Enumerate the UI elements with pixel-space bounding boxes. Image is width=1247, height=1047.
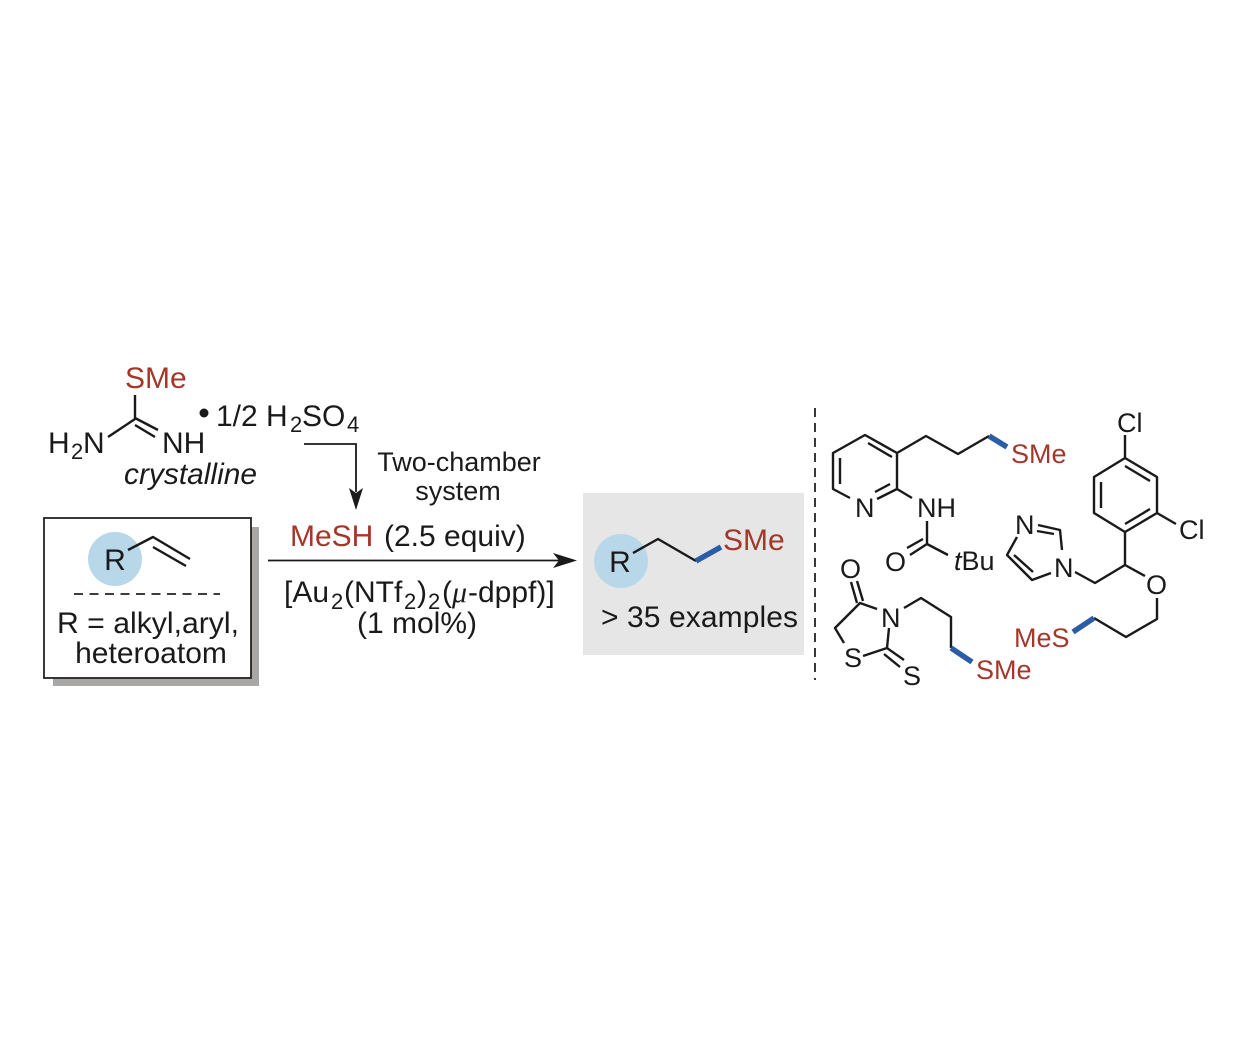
reagent: S-methylisothiourea hemisulfate: crystalline — [124, 458, 257, 491]
catalyst text: ) — [417, 576, 427, 609]
example: imidazole product: O — [1146, 570, 1167, 600]
catalyst text: 2 — [331, 589, 343, 614]
label: two-chamber system: system — [415, 476, 501, 506]
panel: alkene substrate: R = alkyl,aryl, — [57, 607, 239, 640]
example: pyridine product: SMe — [1011, 439, 1067, 469]
panel: alkene substrate: R — [104, 544, 126, 577]
reagent: S-methylisothiourea hemisulfate: 1/2 H — [216, 400, 288, 433]
reagent: S-methylisothiourea hemisulfate — [48, 362, 359, 491]
example: rhodanine product: SMe — [976, 655, 1032, 685]
example: rhodanine product: S — [903, 661, 921, 691]
example: imidazole product: N — [1015, 510, 1034, 540]
label: two-chamber system: Two-chamber — [377, 447, 541, 477]
panel: product: R — [609, 546, 631, 579]
reagent: S-methylisothiourea hemisulfate: 4 — [347, 412, 359, 437]
example: pyridine product — [833, 435, 1067, 577]
reagent text: MeSH: (2.5 equiv) — [384, 520, 526, 553]
icon: R group circle — [88, 532, 142, 586]
example: rhodanine product: N — [881, 603, 900, 633]
reagent: S-methylisothiourea hemisulfate: SMe — [125, 362, 187, 395]
catalyst text: 2 — [428, 589, 440, 614]
panel: alkene substrate — [44, 518, 259, 686]
panel: product — [583, 493, 804, 655]
example: pyridine product: O — [885, 547, 906, 577]
example: rhodanine product — [835, 554, 1032, 691]
panel: product: > 35 examples — [601, 601, 798, 634]
catalyst text: (NTf — [344, 576, 403, 609]
reagent text: MeSH: MeSH — [290, 520, 373, 553]
panel: alkene substrate: heteroatom — [75, 637, 227, 670]
example: pyridine product: NH — [917, 493, 956, 523]
catalyst text — [284, 576, 555, 640]
example: pyridine product: tBu — [954, 546, 995, 576]
reagent: S-methylisothiourea hemisulfate: N — [83, 427, 105, 460]
reagent: S-methylisothiourea hemisulfate: H — [48, 427, 70, 460]
arrow: two-chamber release — [304, 444, 363, 510]
example: pyridine product: N — [855, 493, 874, 523]
reaction arrow — [268, 553, 577, 568]
panel: product: SMe — [723, 524, 785, 557]
icon: R group circle — [594, 534, 648, 588]
example: imidazole product: Cl — [1179, 515, 1204, 545]
reagent: S-methylisothiourea hemisulfate: SO — [302, 400, 345, 433]
divider — [814, 408, 816, 680]
example: imidazole product: N — [1054, 553, 1074, 583]
catalyst text: 2 — [404, 589, 416, 614]
catalyst text: -dppf)] — [468, 576, 555, 609]
example: imidazole product: MeS — [1014, 623, 1070, 653]
reagent: S-methylisothiourea hemisulfate: 2 — [290, 412, 302, 437]
catalyst text: μ — [451, 576, 467, 609]
example: imidazole product — [1007, 408, 1204, 653]
catalyst text: ( — [442, 576, 452, 609]
reagent: S-methylisothiourea hemisulfate: NH — [162, 427, 205, 460]
reagent text: MeSH — [290, 520, 526, 553]
catalyst text: [Au — [284, 576, 329, 609]
example: rhodanine product: S — [844, 643, 862, 673]
reagent: S-methylisothiourea hemisulfate: 2 — [71, 439, 83, 464]
example: rhodanine product: O — [840, 554, 861, 584]
example: imidazole product: Cl — [1117, 408, 1142, 438]
label: two-chamber system — [377, 447, 541, 506]
catalyst text: (1 mol%) — [357, 607, 477, 640]
